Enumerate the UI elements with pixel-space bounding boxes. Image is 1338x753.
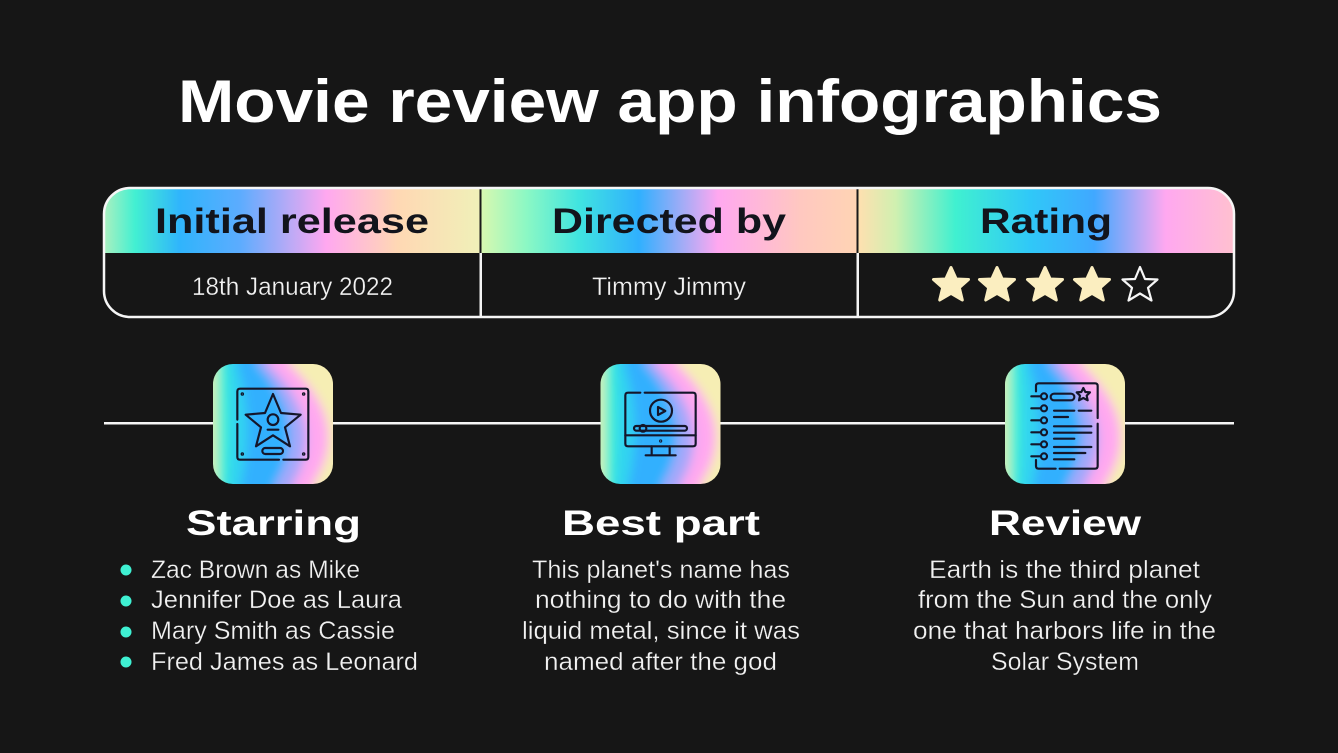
- best part text: This planet's name has: [532, 556, 790, 584]
- bullet: Jennifer Doe: Jennifer Doe as Laura: [151, 586, 402, 614]
- review text: from the Sun and the only: [918, 586, 1213, 614]
- bullet: Zac Brown: Zac Brown as Mike: [151, 556, 360, 584]
- value: director: Timmy Jimmy: [592, 273, 746, 301]
- timeline line: [104, 422, 1234, 424]
- best part text: [522, 556, 800, 676]
- icon: review notebook: [1005, 364, 1125, 484]
- icon: star plaque: [213, 364, 333, 484]
- header cell: rating: [858, 188, 1234, 253]
- title: Movie review app infographics: [178, 68, 1162, 135]
- heading: best part: Best part: [562, 504, 760, 543]
- bullet: Mary Smith: Mary Smith as Cassie: [151, 617, 395, 645]
- review text: Earth is the third planet: [929, 556, 1200, 584]
- icon: video monitor: [600, 364, 720, 484]
- rating stars: [934, 267, 1158, 300]
- value: release date: 18th January 2022: [192, 273, 393, 301]
- heading: initial release: Initial release: [155, 202, 429, 241]
- panel: starring: [120, 504, 418, 676]
- panel: review: [913, 504, 1216, 676]
- panel: info table: [104, 188, 1234, 318]
- heading: starring: Starring: [186, 504, 361, 543]
- heading: review: Review: [989, 504, 1142, 543]
- best part text: named after the god: [544, 648, 777, 676]
- heading: directed by: Directed by: [552, 202, 787, 241]
- review text: Solar System: [991, 648, 1139, 676]
- heading: rating: Rating: [980, 202, 1112, 241]
- panel: best part: [522, 504, 800, 676]
- review text: [913, 556, 1216, 676]
- best part text: liquid metal, since it was: [522, 617, 800, 645]
- header cell: initial release: [104, 188, 480, 253]
- bullet: Fred James: Fred James as Leonard: [151, 648, 418, 676]
- header cell: directed by: [481, 188, 857, 253]
- best part text: nothing to do with the: [535, 586, 786, 614]
- review text: one that harbors life in the: [913, 617, 1216, 645]
